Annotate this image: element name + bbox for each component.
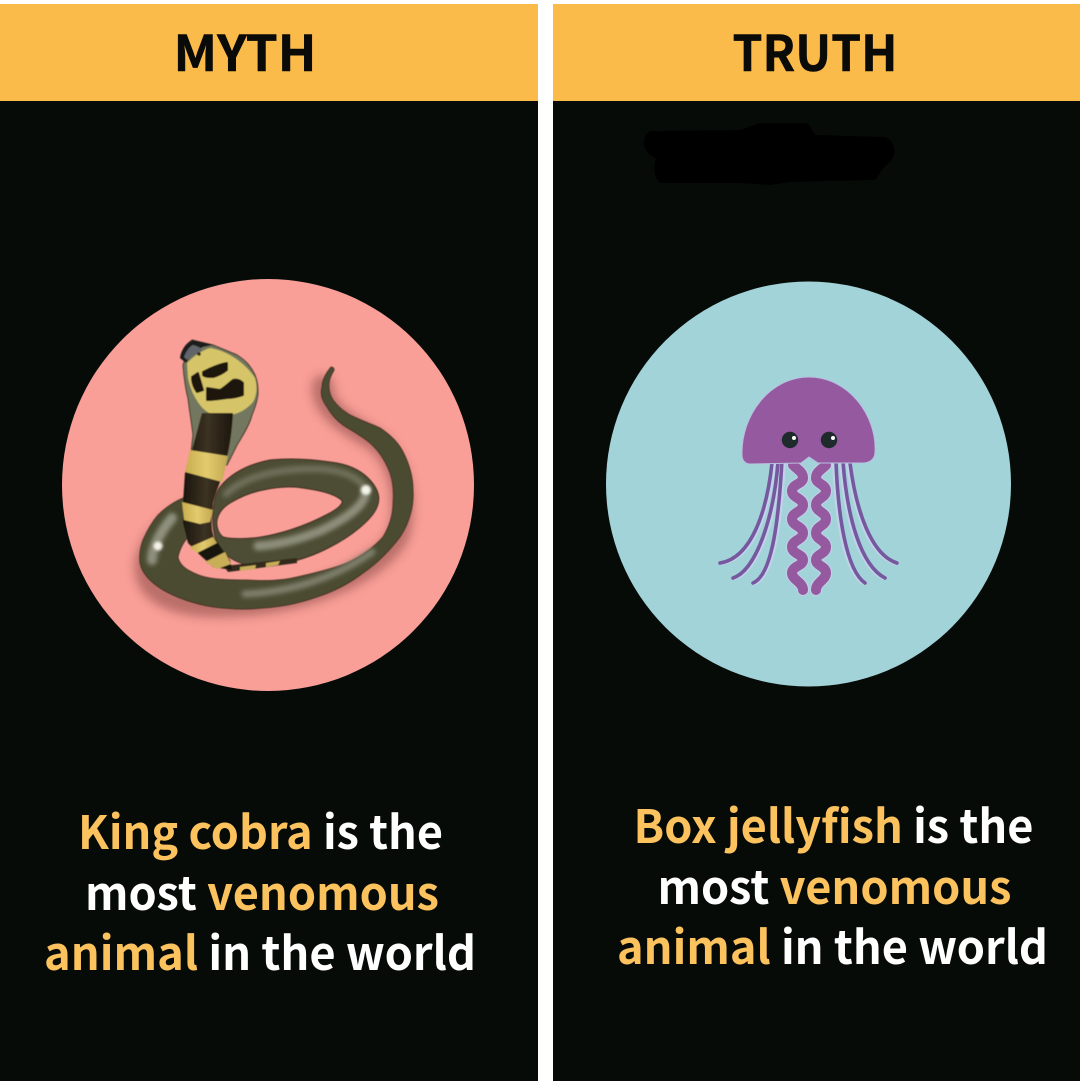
hood yellow [187,348,256,416]
icon: king cobra [140,340,413,609]
panel: myth [0,4,538,984]
frilled arms [792,465,826,590]
panel: truth: most venomous [658,852,1012,918]
scribbled-out text [644,123,894,185]
frilled arm halos [792,465,826,590]
heading: MYTH: MYTH [174,15,316,86]
neck and body [183,413,233,570]
myth header bar [0,4,538,101]
hood sides [183,340,258,465]
panel: truth: animal in the world [617,912,1048,978]
icon: jellyfish [720,377,897,590]
panel: myth: animal in the world [44,918,476,984]
back loop [213,459,379,566]
eyes [782,432,798,448]
loop shading [226,469,362,494]
hood markings [192,363,243,400]
tail and outer coil [140,367,413,609]
bell [742,377,875,464]
outer tentacles [720,460,897,583]
highlights [361,485,371,495]
heading: TRUTH: TRUTH [732,15,898,86]
circle: teal background [606,282,1011,686]
panel: myth: most venomous [85,858,439,924]
snake shadow [145,386,402,606]
coil shading [152,518,172,560]
tentacle halos [722,460,784,583]
ventral stripes [224,558,297,572]
circle: pink background [62,279,474,691]
caption: myth: King cobra is the [78,797,443,863]
head [180,340,213,363]
panel: truth [553,4,1080,978]
caption: truth: Box jellyfish is the [634,791,1034,857]
truth header bar [553,4,1080,101]
